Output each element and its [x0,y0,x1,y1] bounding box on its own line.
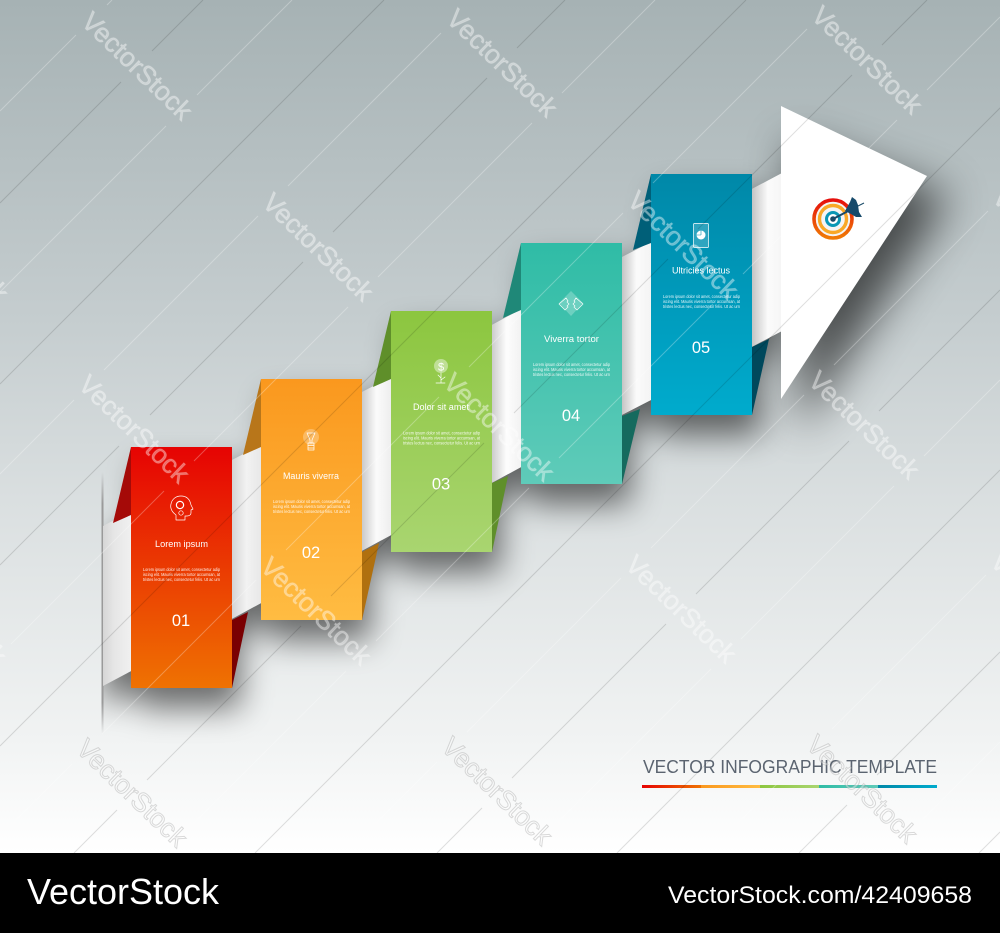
heading: Mauris viverra [283,471,340,482]
card panel [521,243,622,484]
multicolour title rule [642,785,937,788]
card 01 [131,447,232,688]
icon: money plant [434,359,448,383]
icon: phone with pie chart [694,224,708,248]
VectorStock watermarks: VectorStock [255,551,378,671]
VectorStock watermarks: VectorStock [441,3,564,123]
ribbon left edge [102,472,104,734]
number: 02 [302,544,320,562]
template title: VECTOR INFOGRAPHIC TEMPLATE [643,757,937,777]
body text [273,499,351,514]
heading: Viverra tortor [544,334,600,345]
icon: target with dart [814,197,864,238]
card panel [131,447,232,688]
body text: tristes lectus nec, consectetur felis. Ut ac urn [533,372,611,377]
VectorStock watermarks: VectorStock [620,549,743,669]
card 02 [261,379,362,620]
VectorStock watermarks: VectorStock [73,369,196,489]
VectorStock watermarks: VectorStock [803,365,926,485]
number: 03 [432,476,450,494]
body text [663,294,741,309]
heading: Ultricies lectus [672,266,730,276]
body text: tristes lectus nec, consectetur felis. Ut ac urn [403,440,481,446]
card panel [391,311,492,552]
arrow head [781,106,927,399]
card 05 [651,174,752,415]
number: 04 [562,407,580,425]
body text: iscing elit. Mauris viverra tortor accumsan, at [663,299,741,304]
body text [533,362,611,377]
VectorStock watermarks: VectorStock [806,0,929,120]
heading: Lorem ipsum [155,539,208,550]
body text: Lorem ipsum dolor sit amet, consectetur adip [273,499,351,504]
icon: head with gear [171,496,193,520]
VectorStock watermarks: VectorStock [801,729,924,849]
icon: money plant: $ [438,362,444,374]
body text: tristes lectus nec, consectetur felis. Ut ac urn [143,577,221,582]
icon: light bulb [303,429,319,450]
body text: iscing elit. Mauris viverra tortor accumsan, at [143,572,221,577]
body text: iscing elit. Mauris viverra tortor accumsan, at [533,367,611,372]
body text [403,430,481,446]
footer logo text: VectorStock [27,871,220,912]
VectorStock watermarks: VectorStock [76,6,199,126]
footer image id: VectorStock.com/42409658 [668,882,972,909]
VectorStock watermarks: VectorStock [622,185,745,305]
body text [143,567,221,582]
VectorStock watermarks: VectorStock [257,187,380,307]
paper folds behind the cards [113,174,769,688]
card panel [261,379,362,620]
body text: Lorem ipsum dolor sit amet, consectetur adip [143,567,221,572]
number: 01 [172,612,190,630]
VectorStock watermarks: VectorStock [71,733,194,853]
body text: Lorem ipsum dolor sit amet, consectetur adip [533,362,611,367]
body text: Lorem ipsum dolor sit amet, consectetur adip [663,294,741,299]
icon: puzzle pieces [559,291,583,316]
VectorStock watermarks: VectorStock [438,367,561,487]
footer bar [0,853,1000,933]
body text: iscing elit. Mauris viverra tortor accumsan, at [403,436,481,440]
card panel [651,174,752,415]
body text: tristes lectus nec, consectetur felis. Ut ac urn [273,509,351,514]
body text: Lorem ipsum dolor sit amet, consectetur adip [403,430,481,436]
card 04 [521,243,622,484]
body text: tristes lectus nec, consectetur felis. Ut ac urn [663,304,741,309]
card 03 [391,311,492,552]
white ascending ribbon [103,173,782,686]
heading: Dolor sit amet [413,402,469,413]
number: 05 [692,339,710,357]
VectorStock watermarks: VectorStock [436,731,559,851]
body text: iscing elit. Mauris viverra tortor accumsan, at [273,504,351,509]
drop shadows [103,140,950,708]
